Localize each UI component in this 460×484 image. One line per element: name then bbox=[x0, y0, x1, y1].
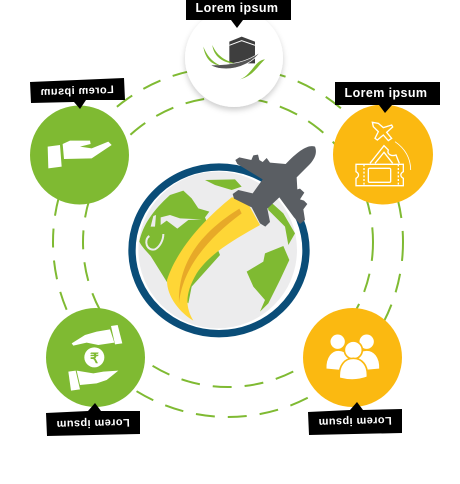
label: top: Lorem ipsum bbox=[196, 1, 278, 15]
globe sphere bbox=[138, 172, 297, 328]
icon label: rupee: ₹ bbox=[90, 350, 99, 366]
circle: top bbox=[185, 9, 283, 107]
label: left bbox=[30, 78, 125, 109]
icon: plane and ticket bbox=[356, 122, 411, 186]
label: bottom right: Lorem ipsum bbox=[318, 414, 392, 428]
airplane bbox=[233, 146, 316, 227]
land: North America bbox=[267, 198, 295, 245]
sea: northern coast curve bbox=[146, 234, 163, 250]
icon: hands and rupee coin bbox=[68, 325, 122, 391]
label: right: Lorem ipsum bbox=[345, 86, 427, 100]
label: bottom left: Lorem ipsum bbox=[56, 416, 130, 430]
label: bottom right bbox=[308, 402, 402, 435]
icon: people group bbox=[326, 334, 380, 380]
land: Greenland bbox=[205, 179, 242, 190]
circle: right bbox=[333, 104, 433, 204]
globe bbox=[132, 146, 316, 334]
land: Europe and Africa bbox=[139, 191, 220, 303]
globe ring bbox=[132, 167, 306, 334]
icon: kaaba with swooshes bbox=[203, 37, 265, 79]
sea: Mediterranean bbox=[161, 215, 202, 229]
label: left: Lorem ipsum bbox=[40, 84, 114, 98]
contrail bbox=[167, 197, 260, 321]
circle: bottom left bbox=[46, 308, 145, 407]
circle: bottom right bbox=[303, 308, 402, 407]
land: South America bbox=[247, 246, 289, 312]
sea: inlet bbox=[151, 215, 156, 227]
label: bottom left bbox=[46, 403, 140, 436]
circle: left bbox=[30, 106, 129, 204]
icon: open hand bbox=[48, 141, 112, 168]
label: top bbox=[186, 0, 291, 28]
label: right bbox=[335, 82, 440, 113]
